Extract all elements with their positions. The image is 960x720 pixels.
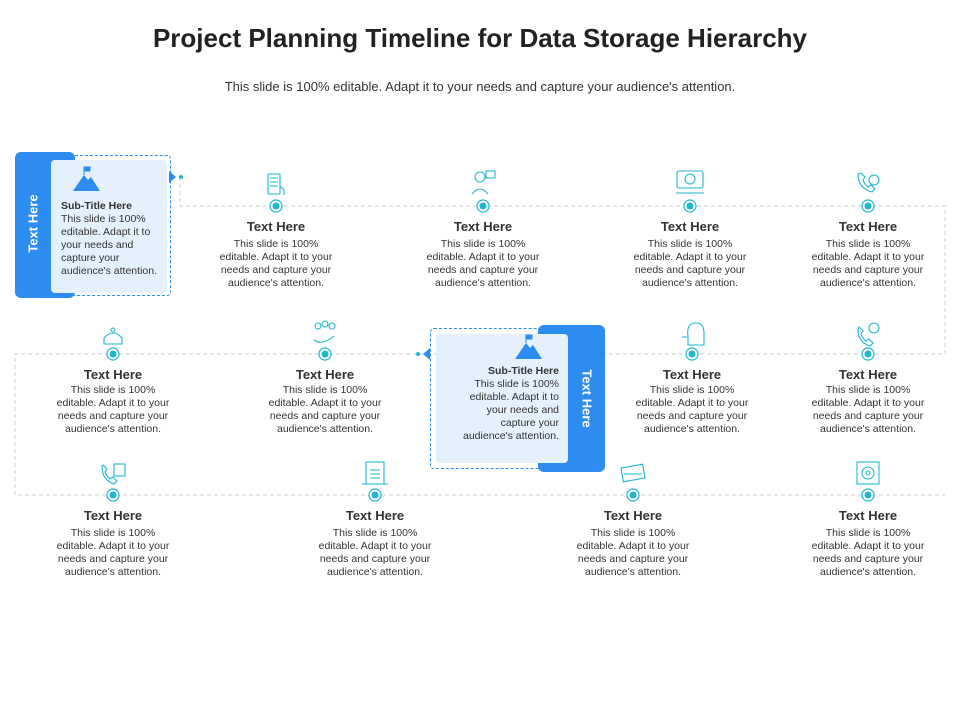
dashed outline: [430, 328, 542, 469]
item: This slide is 100% editable. Adapt it to your needs and capture your audience's attention.: [812, 527, 924, 578]
card: left highlight: [15, 152, 176, 298]
item: Text Here: [663, 367, 721, 382]
item: Text Here: [296, 367, 354, 382]
mountain icon: [515, 334, 542, 359]
arrow: [423, 348, 430, 360]
item row2: Text Here: [84, 367, 142, 382]
item: This slide is 100% editable. Adapt it to your needs and capture your audience's attention.: [634, 238, 746, 289]
item: This slide is 100% editable. Adapt it to your needs and capture your audience's attention.: [269, 384, 381, 435]
card text: Sub-Title Here: [488, 365, 559, 377]
item: Text Here: [346, 508, 404, 523]
vertical label: Text Here: [26, 194, 40, 253]
item row1: This slide is 100% editable. Adapt it to your needs and capture your audience's attention.: [220, 238, 332, 289]
light panel: [51, 160, 167, 293]
item row1: Text Here: [247, 219, 305, 234]
item: This slide is 100% editable. Adapt it to your needs and capture your audience's attention.: [812, 238, 924, 289]
title: Project Planning Timeline for Data Storage Hierarchy: [153, 23, 807, 53]
blue tab: [15, 152, 75, 298]
item: This slide is 100% editable. Adapt it to your needs and capture your audience's attention.: [812, 384, 924, 435]
card text: This slide is 100% editable. Adapt it to your needs and capture your audience's attention.: [61, 213, 157, 277]
item: This slide is 100% editable. Adapt it to your needs and capture your audience's attention.: [427, 238, 539, 289]
item: Text Here: [839, 508, 897, 523]
dashed outline: [51, 155, 171, 296]
icons: [102, 171, 879, 484]
item row2: This slide is 100% editable. Adapt it to your needs and capture your audience's attention.: [57, 384, 169, 435]
item: Text Here: [604, 508, 662, 523]
item: Text Here: [661, 219, 719, 234]
item: Text Here: [839, 219, 897, 234]
arrow: [169, 171, 176, 183]
blue tab: [538, 325, 605, 472]
subtitle: This slide is 100% editable. Adapt it to your needs and capture your audience's attention.: [225, 79, 735, 94]
light panel: [436, 334, 568, 463]
card: middle highlight: [423, 325, 605, 472]
item row3: This slide is 100% editable. Adapt it to your needs and capture your audience's attention.: [57, 527, 169, 578]
item: This slide is 100% editable. Adapt it to your needs and capture your audience's attention.: [636, 384, 748, 435]
item: This slide is 100% editable. Adapt it to your needs and capture your audience's attention.: [319, 527, 431, 578]
item: This slide is 100% editable. Adapt it to your needs and capture your audience's attention.: [577, 527, 689, 578]
item row3: Text Here: [84, 508, 142, 523]
item: Text Here: [454, 219, 512, 234]
vertical label: Text Here: [580, 369, 594, 428]
card text: This slide is 100% editable. Adapt it to your needs and capture your audience's attention.: [463, 378, 559, 442]
mountain icon: [73, 166, 100, 191]
item: Text Here: [839, 367, 897, 382]
card text: Sub-Title Here: [61, 200, 132, 212]
